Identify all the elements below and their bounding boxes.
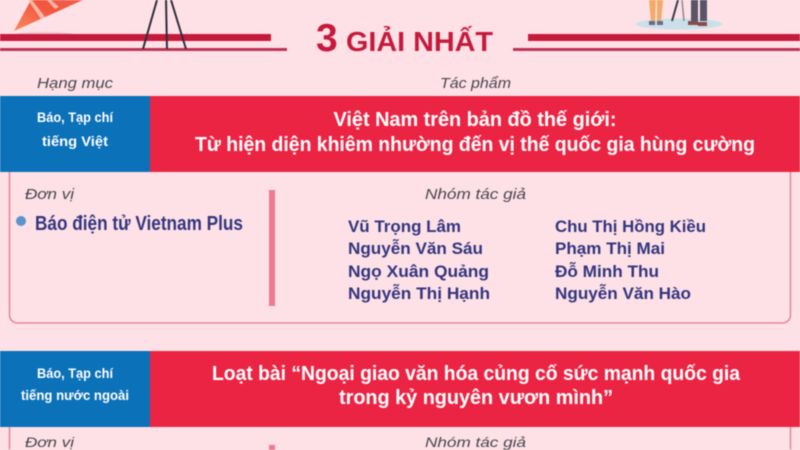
- heading: [316, 17, 493, 60]
- authors left column: Nguyễn Văn Sáu: [348, 239, 483, 258]
- right header rules: [513, 34, 800, 51]
- authors left column: [348, 217, 490, 303]
- label: unit: Đơn vị: [25, 434, 75, 450]
- label: unit: Đơn vị: [25, 186, 75, 203]
- category label: Báo, Tạp chí: [37, 365, 114, 381]
- icon: two reporters with camera: [636, 0, 722, 30]
- authors left column: Nguyễn Thị Hạnh: [348, 284, 490, 303]
- label: authors: Nhóm tác giả: [425, 434, 526, 450]
- authors right column: Đỗ Minh Thu: [555, 262, 659, 281]
- column label: category: Hạng mục: [37, 75, 114, 92]
- authors right column: Nguyễn Văn Hào: [555, 284, 691, 303]
- band: second award: trong kỷ nguyên vươn mình”: [339, 387, 613, 409]
- work title: Việt Nam trên bản đồ thế giới:: [334, 109, 616, 131]
- unit name: Báo điện tử Vietnam Plus: [35, 213, 243, 235]
- column label: work: Tác phẩm: [440, 75, 511, 92]
- icon: megaphone cone: [14, 0, 83, 31]
- label: authors: Nhóm tác giả: [425, 186, 526, 203]
- authors right column: [555, 217, 706, 303]
- icon: camera tripod: [143, 0, 186, 49]
- band: second award: [0, 351, 800, 427]
- divider: [269, 445, 275, 450]
- band: first award: Từ hiện diện khiêm nhường đến vị thế quốc gia hùng cường: [195, 134, 755, 156]
- left header rules: [0, 32, 287, 51]
- category label: Báo, Tạp chí: [37, 109, 114, 125]
- heading: 3: [316, 17, 338, 60]
- band: second award: tiếng nước ngoài: [21, 387, 129, 403]
- heading: GIẢI NHẤT: [346, 25, 493, 57]
- divider: [269, 190, 275, 306]
- authors left column: Vũ Trọng Lâm: [348, 217, 461, 236]
- bullet: [16, 216, 26, 226]
- panel: first award details: [10, 160, 790, 323]
- panel: second award details: [10, 427, 790, 450]
- band: first award: tiếng Việt: [42, 133, 108, 149]
- authors left column: Ngọ Xuân Quảng: [348, 262, 489, 281]
- authors right column: Phạm Thị Mai: [555, 239, 665, 258]
- work title: Loạt bài “Ngoại giao văn hóa củng cố sức mạnh quốc gia: [212, 363, 741, 385]
- band: first award: [0, 96, 800, 172]
- authors right column: Chu Thị Hồng Kiều: [555, 217, 706, 236]
